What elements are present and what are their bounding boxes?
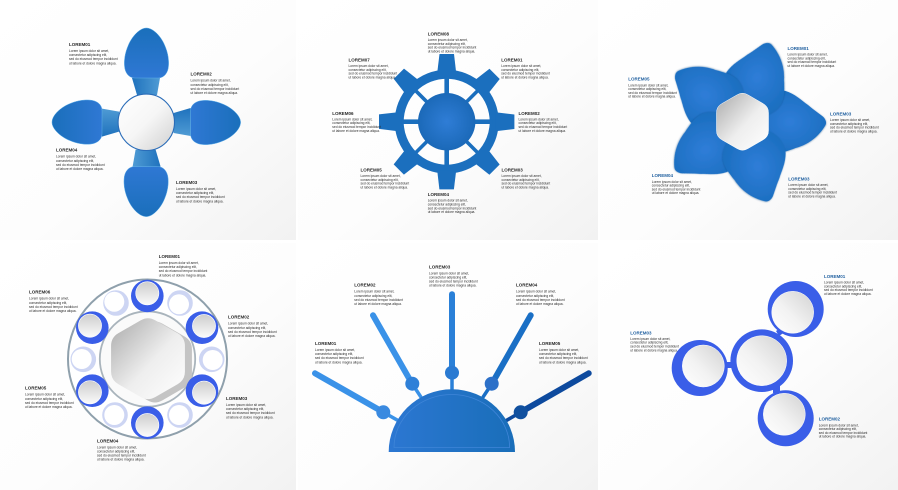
text: LOREM01: consectetur adipiscing elit, bbox=[315, 352, 353, 356]
hexagon shadow bbox=[118, 322, 192, 402]
text: LOREM02: Lorem ipsum dolor sit amet, bbox=[228, 322, 268, 326]
text: LOREM01: Lorem ipsum dolor sit amet, bbox=[824, 281, 864, 285]
text: LOREM05: LOREM05 bbox=[539, 341, 561, 346]
text: LOREM05: ut labore et dolore magna aliqua. bbox=[628, 95, 676, 99]
text: LOREM06: sed do eiusmod tempor incididunt bbox=[332, 125, 381, 129]
text: LOREM06: LOREM06 bbox=[332, 111, 354, 116]
blue node 02 bbox=[186, 311, 218, 344]
connector: bottom bbox=[133, 150, 161, 167]
text: LOREM01: consectetur adipiscing elit, bbox=[788, 56, 826, 60]
text: LOREM06 bbox=[332, 111, 381, 133]
text: LOREM05 bbox=[360, 167, 409, 189]
text: LOREM01: ut labore et dolore magna aliqua. bbox=[315, 360, 363, 364]
text: LOREM03 bbox=[176, 180, 225, 203]
text: LOREM03: ut labore et dolore magna aliqua. bbox=[502, 185, 549, 189]
ray 03 bbox=[445, 294, 459, 390]
outer ring bbox=[68, 280, 227, 438]
text: LOREM03: Lorem ipsum dolor sit amet, bbox=[630, 337, 670, 341]
text: LOREM03: consectetur adipiscing elit, bbox=[630, 341, 669, 345]
text: LOREM04 bbox=[97, 438, 146, 462]
text: LOREM04: ut labore et dolore magna aliqua. bbox=[652, 191, 699, 195]
text: LOREM03 bottom bbox=[788, 176, 837, 198]
text: LOREM04: sed do eiusmod tempor incididunt bbox=[516, 298, 565, 302]
blue node 04 bbox=[131, 406, 164, 439]
text: LOREM04: ut labore et dolore magna aliqua. bbox=[56, 167, 104, 171]
text: LOREM05: consectetur adipiscing elit, bbox=[25, 397, 63, 401]
text: LOREM05: consectetur adipiscing elit, bbox=[628, 87, 667, 91]
text: LOREM08: sed do eiusmod tempor incididunt bbox=[428, 46, 476, 50]
text: LOREM01: Lorem ipsum dolor sit amet, bbox=[501, 64, 541, 68]
text: LOREM01 bbox=[315, 341, 364, 364]
text: LOREM03 bbox=[502, 167, 550, 189]
text: LOREM03: sed do eiusmod tempor incididunt bbox=[502, 182, 550, 186]
text: LOREM04: consectetur adipiscing elit, bbox=[97, 449, 135, 453]
blue node 03 bbox=[186, 374, 218, 407]
text: LOREM05: Lorem ipsum dolor sit amet, bbox=[360, 174, 401, 178]
text: LOREM03 bottom: LOREM03 bbox=[788, 176, 810, 182]
text: LOREM04: Lorem ipsum dolor sit amet, bbox=[56, 155, 96, 159]
text: LOREM03: LOREM03 bbox=[226, 396, 248, 401]
text: LOREM03 bottom: Lorem ipsum dolor sit amet, bbox=[788, 183, 828, 187]
text: LOREM02: LOREM02 bbox=[354, 283, 376, 288]
text: LOREM04: Lorem ipsum dolor sit amet, bbox=[652, 180, 692, 184]
text: LOREM08: Lorem ipsum dolor sit amet, bbox=[428, 38, 468, 42]
text: LOREM01: sed do eiusmod tempor incididunt bbox=[69, 57, 118, 61]
text: LOREM05: consectetur adipiscing elit, bbox=[360, 178, 399, 182]
ray 05 bbox=[506, 373, 589, 421]
text: LOREM01: ut labore et dolore magna aliqua. bbox=[824, 292, 872, 296]
pale circles bbox=[70, 290, 224, 428]
text: LOREM04: Lorem ipsum dolor sit amet, bbox=[97, 445, 137, 449]
text: LOREM08: consectetur adipiscing elit, bbox=[428, 42, 466, 46]
text: LOREM08: ut labore et dolore magna aliqua. bbox=[428, 49, 475, 53]
text: LOREM05: ut labore et dolore magna aliqua. bbox=[539, 360, 587, 364]
text: LOREM01 bbox=[824, 274, 873, 296]
panel: linked circles bbox=[600, 243, 898, 490]
text: LOREM06 bbox=[29, 290, 78, 313]
text: LOREM02: LOREM02 bbox=[518, 111, 540, 116]
text: LOREM06: ut labore et dolore magna aliqua. bbox=[332, 129, 380, 133]
text: LOREM04: LOREM04 bbox=[56, 148, 78, 153]
text: LOREM02: Lorem ipsum dolor sit amet, bbox=[819, 423, 859, 427]
text: LOREM02: ut labore et dolore magna aliqua. bbox=[354, 302, 402, 306]
text: LOREM07: ut labore et dolore magna aliqua. bbox=[348, 76, 396, 80]
text: LOREM01: ut labore et dolore magna aliqua. bbox=[69, 61, 117, 65]
text: LOREM07: sed do eiusmod tempor incididunt bbox=[348, 72, 397, 76]
text: LOREM03 right: sed do eiusmod tempor incididunt bbox=[830, 126, 879, 130]
ray 02 bbox=[373, 315, 421, 397]
circle: top right bbox=[768, 281, 824, 337]
text: LOREM04: ut labore et dolore magna aliqua. bbox=[428, 210, 475, 214]
text: LOREM02: ut labore et dolore magna aliqua. bbox=[228, 334, 276, 338]
text: LOREM03 bbox=[429, 264, 478, 288]
text: LOREM03: LOREM03 bbox=[630, 330, 652, 335]
text: LOREM03: LOREM03 bbox=[429, 264, 451, 269]
text: LOREM05: sed do eiusmod tempor incididunt bbox=[628, 91, 677, 95]
text: LOREM02: Lorem ipsum dolor sit amet, bbox=[518, 117, 559, 121]
text: LOREM03: sed do eiusmod tempor incididunt bbox=[429, 279, 478, 283]
panel: bearing ring diagram bbox=[0, 243, 296, 490]
text: LOREM04: consectetur adipiscing elit, bbox=[428, 203, 466, 207]
text: LOREM02: consectetur adipiscing elit, bbox=[354, 294, 393, 298]
text: LOREM05: LOREM05 bbox=[25, 386, 47, 391]
flower petals bbox=[657, 33, 826, 211]
connector: right bbox=[174, 108, 191, 136]
text: LOREM01: sed do eiusmod tempor incididunt bbox=[159, 269, 207, 273]
text: LOREM04: LOREM04 bbox=[516, 283, 538, 288]
text: LOREM06: LOREM06 bbox=[29, 290, 51, 295]
text: LOREM01: consectetur adipiscing elit, bbox=[824, 284, 862, 288]
text: LOREM01: consectetur adipiscing elit, bbox=[159, 265, 197, 269]
text: LOREM01: LOREM01 bbox=[824, 274, 846, 279]
connectors bbox=[725, 327, 785, 393]
text: LOREM01: consectetur adipiscing elit, bbox=[69, 53, 107, 57]
text: LOREM03: sed do eiusmod tempor incididunt bbox=[630, 344, 679, 348]
text: LOREM05: Lorem ipsum dolor sit amet, bbox=[628, 83, 668, 87]
text: LOREM01: sed do eiusmod tempor incididunt bbox=[788, 60, 836, 64]
text: LOREM05: consectetur adipiscing elit, bbox=[539, 352, 577, 356]
text: LOREM02 bbox=[190, 72, 239, 95]
text: LOREM06: consectetur adipiscing elit, bbox=[29, 301, 67, 305]
text: LOREM02 bbox=[518, 111, 567, 133]
text: LOREM06: ut labore et dolore magna aliqua. bbox=[29, 309, 77, 313]
text: LOREM01: LOREM01 bbox=[159, 254, 180, 259]
text: LOREM02: ut labore et dolore magna aliqua. bbox=[819, 435, 866, 439]
petal: left bbox=[52, 100, 102, 144]
text: LOREM05 bbox=[539, 341, 588, 364]
text: LOREM05: sed do eiusmod tempor incididunt bbox=[360, 182, 409, 186]
text: LOREM02: LOREM02 bbox=[819, 417, 840, 422]
text: LOREM05: Lorem ipsum dolor sit amet, bbox=[539, 348, 579, 352]
text: LOREM02: LOREM02 bbox=[190, 72, 212, 77]
text: LOREM02: consectetur adipiscing elit, bbox=[228, 326, 266, 330]
text: LOREM01: LOREM01 bbox=[69, 42, 91, 47]
center hexagon bbox=[111, 318, 185, 399]
text: LOREM08 bbox=[428, 31, 476, 53]
connector: top bbox=[132, 78, 160, 95]
blue node 06 bbox=[76, 311, 109, 344]
text: LOREM04: LOREM04 bbox=[652, 173, 674, 178]
center hexagon bbox=[716, 93, 768, 150]
text: LOREM01: sed do eiusmod tempor incididunt bbox=[824, 288, 873, 292]
gear bbox=[379, 54, 514, 189]
circle: left bbox=[672, 340, 728, 396]
petal: bottom bbox=[124, 167, 168, 217]
text: LOREM03 right bbox=[830, 112, 879, 134]
panel: five petal flower bbox=[600, 0, 898, 240]
text: LOREM04: ut labore et dolore magna aliqua. bbox=[97, 458, 145, 462]
text: LOREM03 bottom: consectetur adipiscing elit, bbox=[788, 187, 827, 191]
text: LOREM02 bbox=[228, 315, 277, 338]
text: LOREM02: consectetur adipiscing elit, bbox=[518, 121, 557, 125]
text: LOREM05: Lorem ipsum dolor sit amet, bbox=[25, 393, 65, 397]
text: LOREM03: Lorem ipsum dolor sit amet, bbox=[429, 271, 469, 275]
text: LOREM03: consectetur adipiscing elit, bbox=[176, 191, 214, 195]
text: LOREM05: ut labore et dolore magna aliqua. bbox=[360, 185, 408, 189]
text: LOREM02: sed do eiusmod tempor incididunt bbox=[228, 330, 277, 334]
text: LOREM02: sed do eiusmod tempor incididunt bbox=[518, 125, 567, 129]
text: LOREM01: sed do eiusmod tempor incididunt bbox=[315, 356, 364, 360]
text: LOREM02 bbox=[819, 417, 867, 439]
text: LOREM03 bottom: sed do eiusmod tempor incididunt bbox=[788, 191, 837, 195]
text: LOREM04: sed do eiusmod tempor incididunt bbox=[652, 187, 700, 191]
text: LOREM03: sed do eiusmod tempor incididunt bbox=[226, 411, 275, 415]
text: LOREM01: LOREM01 bbox=[788, 46, 809, 51]
circle: bottom bbox=[758, 390, 814, 446]
panel: four petal diagram bbox=[0, 0, 296, 240]
text: LOREM01: Lorem ipsum dolor sit amet, bbox=[788, 53, 828, 57]
petal: top bbox=[124, 28, 169, 78]
connector: left bbox=[102, 109, 119, 137]
text: LOREM03: Lorem ipsum dolor sit amet, bbox=[226, 403, 266, 407]
text: LOREM02: consectetur adipiscing elit, bbox=[190, 83, 229, 87]
inner ring bbox=[100, 311, 195, 407]
text: LOREM02: consectetur adipiscing elit, bbox=[819, 427, 857, 431]
center circle bbox=[730, 329, 793, 392]
text: LOREM05: sed do eiusmod tempor incididunt bbox=[539, 356, 588, 360]
text: LOREM04: Lorem ipsum dolor sit amet, bbox=[428, 199, 468, 203]
text: LOREM05: sed do eiusmod tempor incididunt bbox=[25, 401, 74, 405]
text: LOREM03: ut labore et dolore magna aliqua. bbox=[226, 415, 274, 419]
text: LOREM05 bbox=[628, 77, 677, 99]
text: LOREM04: LOREM04 bbox=[428, 192, 449, 197]
petal: right bbox=[191, 100, 241, 145]
text: LOREM03: ut labore et dolore magna aliqua. bbox=[429, 284, 477, 288]
text: LOREM03 bottom: ut labore et dolore magna aliqua. bbox=[788, 194, 836, 198]
text: LOREM01 bbox=[501, 58, 550, 80]
text: LOREM07: consectetur adipiscing elit, bbox=[348, 68, 387, 72]
text: LOREM01: LOREM01 bbox=[315, 341, 337, 346]
text: LOREM01: LOREM01 bbox=[501, 58, 523, 62]
text: LOREM07: LOREM07 bbox=[348, 58, 370, 62]
text: LOREM01: sed do eiusmod tempor incididunt bbox=[501, 72, 550, 76]
center disc bbox=[118, 94, 174, 150]
text: LOREM03: sed do eiusmod tempor incididunt bbox=[176, 195, 225, 199]
text: LOREM02: LOREM02 bbox=[228, 315, 250, 320]
ray 01 bbox=[315, 373, 398, 421]
text: LOREM03: ut labore et dolore magna aliqua. bbox=[176, 199, 224, 203]
text: LOREM06: sed do eiusmod tempor incididunt bbox=[29, 305, 78, 309]
text: LOREM06: Lorem ipsum dolor sit amet, bbox=[332, 117, 372, 121]
text: LOREM01: Lorem ipsum dolor sit amet, bbox=[315, 348, 355, 352]
text: LOREM04: ut labore et dolore magna aliqua. bbox=[516, 302, 564, 306]
text: LOREM01: Lorem ipsum dolor sit amet, bbox=[69, 49, 109, 53]
text: LOREM04: consectetur adipiscing elit, bbox=[516, 294, 554, 298]
text: LOREM01 bbox=[69, 42, 118, 65]
text: LOREM02: sed do eiusmod tempor incididunt bbox=[190, 87, 239, 91]
text: LOREM03 right: Lorem ipsum dolor sit amet, bbox=[830, 118, 870, 122]
text: LOREM03 bbox=[630, 330, 679, 352]
text: LOREM07: Lorem ipsum dolor sit amet, bbox=[348, 64, 389, 68]
blue node 01 bbox=[131, 280, 164, 312]
text: LOREM02: ut labore et dolore magna aliqua. bbox=[518, 129, 566, 133]
blue node 05 bbox=[76, 374, 109, 407]
text: LOREM01: Lorem ipsum dolor sit amet, bbox=[159, 261, 199, 265]
text: LOREM01: consectetur adipiscing elit, bbox=[501, 68, 539, 72]
ray 04 bbox=[483, 315, 531, 397]
text: LOREM04 bbox=[652, 173, 700, 195]
text: LOREM02 bbox=[354, 283, 403, 306]
text: LOREM06: consectetur adipiscing elit, bbox=[332, 121, 371, 125]
text: LOREM04 bbox=[428, 192, 476, 214]
text: LOREM03 right: ut labore et dolore magna aliqua. bbox=[830, 130, 878, 134]
text: LOREM04 bbox=[56, 148, 105, 171]
text: LOREM01: ut labore et dolore magna aliqua. bbox=[788, 64, 835, 68]
text: LOREM03: LOREM03 bbox=[176, 180, 198, 185]
text: LOREM05 bbox=[25, 386, 74, 409]
text: LOREM03 right: consectetur adipiscing elit, bbox=[830, 122, 868, 126]
text: LOREM05: LOREM05 bbox=[628, 77, 650, 82]
text: LOREM05: ut labore et dolore magna aliqua. bbox=[25, 405, 73, 409]
text: LOREM03: consectetur adipiscing elit, bbox=[429, 275, 467, 279]
text: LOREM02: ut labore et dolore magna aliqua. bbox=[190, 91, 238, 95]
text: LOREM04: Lorem ipsum dolor sit amet, bbox=[516, 290, 556, 294]
text: LOREM03: consectetur adipiscing elit, bbox=[226, 407, 264, 411]
text: LOREM02: Lorem ipsum dolor sit amet, bbox=[190, 79, 231, 83]
text: LOREM05: LOREM05 bbox=[360, 167, 382, 172]
text: LOREM04: sed do eiusmod tempor incididunt bbox=[56, 163, 105, 167]
text: LOREM03: consectetur adipiscing elit, bbox=[502, 178, 540, 182]
text: LOREM06: Lorem ipsum dolor sit amet, bbox=[29, 297, 69, 301]
text: LOREM04: sed do eiusmod tempor incididunt bbox=[428, 206, 476, 210]
semicircle bbox=[389, 389, 515, 452]
text: LOREM03 right: LOREM03 bbox=[830, 112, 852, 116]
text: LOREM04: consectetur adipiscing elit, bbox=[652, 184, 690, 188]
text: LOREM04 bbox=[516, 283, 565, 306]
text: LOREM01: ut labore et dolore magna aliqua. bbox=[159, 273, 206, 277]
text: LOREM04: sed do eiusmod tempor incididunt bbox=[97, 453, 146, 457]
text: LOREM03: ut labore et dolore magna aliqua. bbox=[630, 348, 678, 352]
panel: gear diagram bbox=[298, 0, 598, 240]
text: LOREM01 bbox=[788, 46, 836, 68]
text: LOREM04: consectetur adipiscing elit, bbox=[56, 159, 94, 163]
text: LOREM04: LOREM04 bbox=[97, 438, 119, 443]
text: LOREM02: sed do eiusmod tempor incididunt bbox=[819, 431, 867, 435]
text: LOREM08: LOREM08 bbox=[428, 31, 449, 36]
text: LOREM01: ut labore et dolore magna aliqua. bbox=[501, 76, 549, 80]
text: LOREM02: sed do eiusmod tempor incididunt bbox=[354, 298, 403, 302]
text: LOREM03: Lorem ipsum dolor sit amet, bbox=[502, 174, 542, 178]
text: LOREM02: Lorem ipsum dolor sit amet, bbox=[354, 290, 394, 294]
text: LOREM03: Lorem ipsum dolor sit amet, bbox=[176, 187, 216, 191]
text: LOREM03: LOREM03 bbox=[502, 167, 523, 172]
panel: semicircle rays bbox=[298, 243, 598, 490]
text: LOREM07 bbox=[348, 58, 397, 80]
text: LOREM01 bbox=[159, 254, 207, 277]
text: LOREM03 bbox=[226, 396, 275, 419]
